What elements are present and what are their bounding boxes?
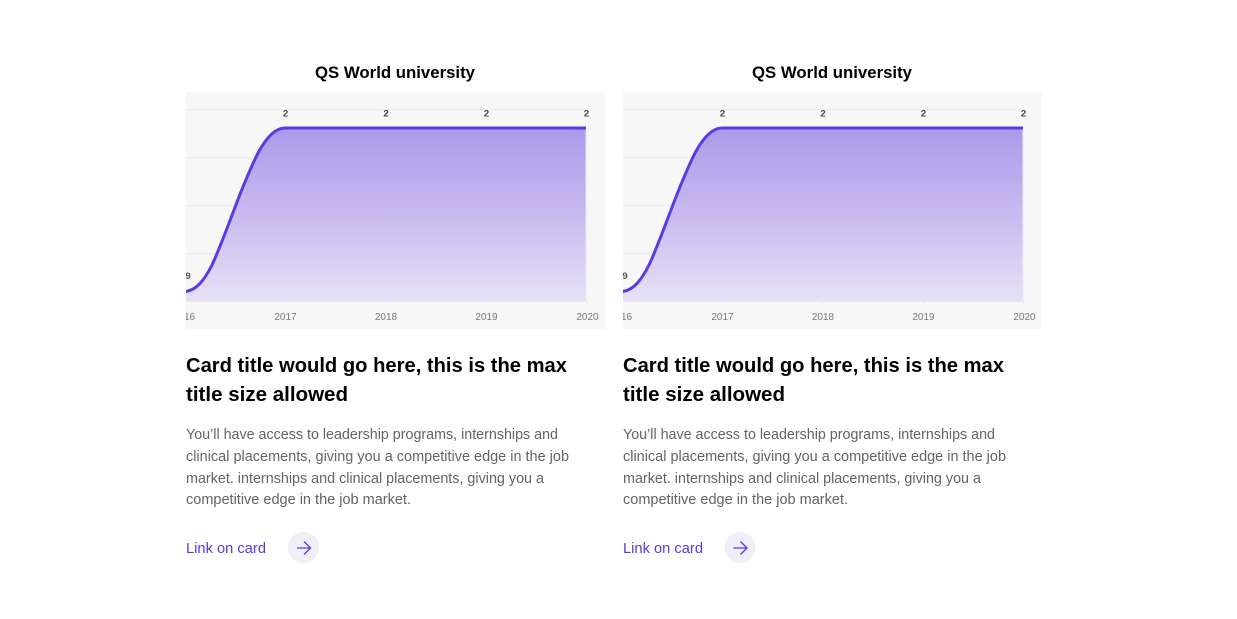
area chart: left: 9 [185,271,191,282]
area chart: right: 2017 [711,312,734,323]
card title: right [623,354,1005,406]
area chart: left: 2017 [274,312,297,323]
area chart: left: 2 [584,108,589,120]
area chart: left: 2 [484,108,489,120]
area chart: left: 2 [283,108,288,120]
area chart: right: 2018 [812,312,835,323]
area chart: right: 2019 [912,312,935,323]
card body text: right: You’ll have access to leadership programs, internships and [623,427,995,443]
area chart: left: 2019 [475,312,498,323]
area chart: left: 2020 [576,312,599,323]
card body text: left: market. internships and clinical placements, giving you a [186,471,545,487]
card title: left: Card title would go here, this is the max [186,354,568,377]
card body text: left: clinical placements, giving you a competitive edge in the job [186,449,569,465]
card: left [173,63,605,563]
card body text: right: competitive edge in the job market. [623,492,848,508]
area chart: left: 2 [383,108,389,120]
link: right: Link on card [623,541,703,557]
area chart: right [623,109,1036,320]
chart heading: left: QS World university [315,63,476,82]
card title: right: title size allowed [623,383,785,406]
card: right [610,63,1042,563]
link: left: Link on card [186,541,266,557]
card body text: left [186,427,569,508]
area chart: right: 2 [921,108,926,120]
card body text: left: competitive edge in the job market. [186,492,411,508]
chart heading: right: QS World university [752,63,913,82]
area chart: left: 2016 [173,312,196,323]
card title: left [186,354,568,406]
area chart: left: 2018 [375,312,398,323]
icon: arrow button left [288,532,319,563]
card body text: left: You’ll have access to leadership programs, internships and [186,427,558,443]
card body text: right: clinical placements, giving you a competitive edge in the job [623,449,1006,465]
area chart: right: 2 [720,108,725,120]
card body text: right [623,427,1006,508]
area chart: right: 9 [622,271,628,282]
icon: arrow button right [724,532,756,563]
area chart: right: 2 [820,108,826,120]
card title: right: Card title would go here, this is the max [623,354,1005,377]
area chart: right: 2016 [610,312,633,323]
card body text: right: market. internships and clinical placements, giving you a [623,471,982,487]
area chart: right: 2020 [1013,312,1036,323]
area chart: right: 2 [1021,108,1026,120]
area chart: left [186,109,598,320]
card title: left: title size allowed [186,383,348,406]
